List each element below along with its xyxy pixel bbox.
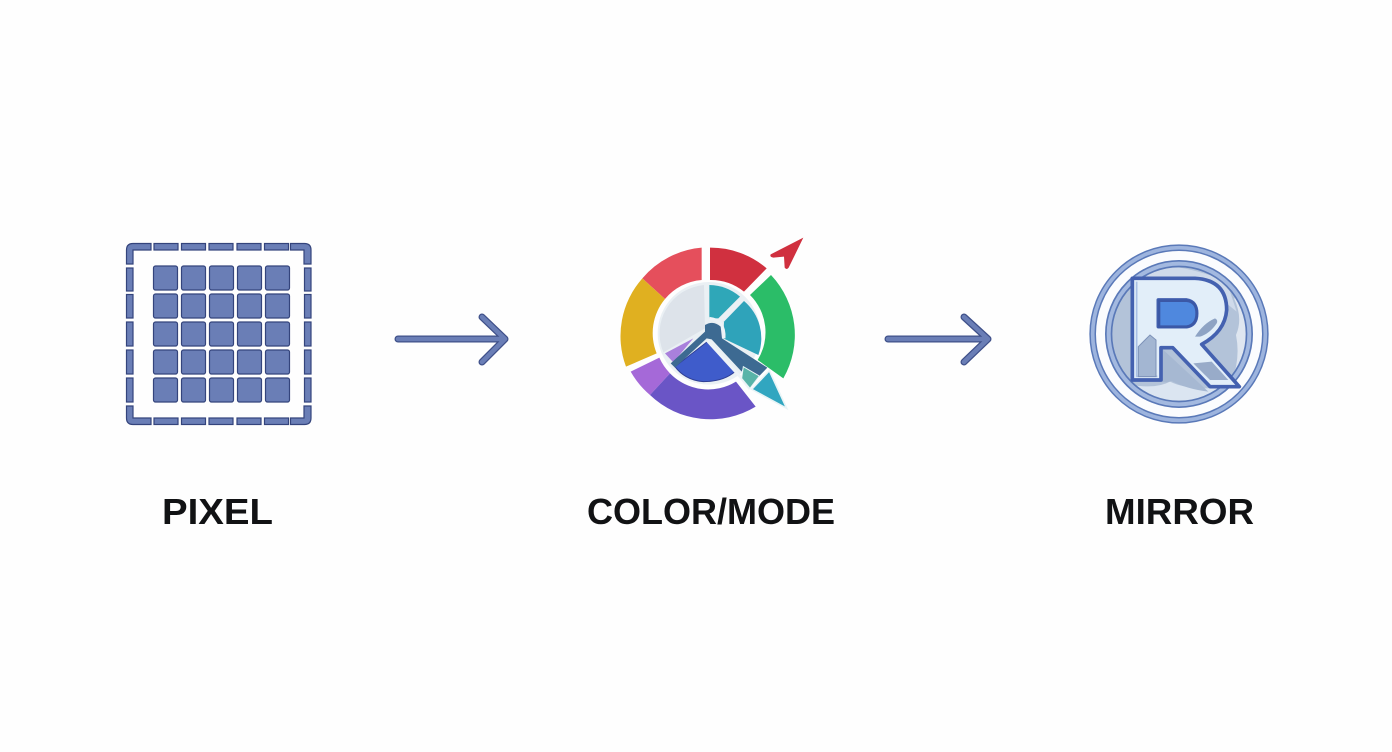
arrow: pixel to color/mode bbox=[398, 317, 505, 362]
needle hub and arms bbox=[671, 323, 767, 376]
R leg shading bbox=[1193, 362, 1228, 380]
letter R bbox=[1132, 278, 1239, 387]
arrow: color/mode to mirror bbox=[888, 317, 988, 362]
pale ring around inner disc bbox=[658, 282, 760, 385]
icon: mirror R badge bbox=[1093, 248, 1265, 420]
outer ring segments bbox=[620, 248, 795, 419]
infographic canvas bbox=[126, 238, 1269, 524]
label: COLOR/MODE: COLOR/MODE bbox=[587, 491, 835, 532]
inner disc segments bbox=[660, 285, 761, 382]
pixel squares bbox=[154, 266, 290, 402]
outer ring bbox=[1093, 248, 1265, 420]
white separators bbox=[707, 318, 750, 389]
R left edge highlight bbox=[1137, 282, 1157, 376]
red arrow bbox=[770, 238, 803, 269]
dashed frame bbox=[126, 244, 311, 424]
label: MIRROR: MIRROR bbox=[1105, 491, 1254, 532]
R stem shading bbox=[1138, 335, 1156, 377]
R bowl shading bbox=[1195, 318, 1217, 337]
R counter bbox=[1159, 301, 1197, 327]
icon: color wheel with arrows bbox=[620, 238, 803, 419]
icon: pixel grid with dashed frame bbox=[126, 244, 311, 424]
background waves bbox=[1137, 268, 1246, 401]
inner ring bbox=[1109, 264, 1249, 404]
inner disc bbox=[1111, 266, 1247, 402]
teal arrowhead bbox=[752, 371, 787, 408]
small teal square bbox=[742, 367, 759, 388]
label: PIXEL: PIXEL bbox=[162, 491, 273, 532]
